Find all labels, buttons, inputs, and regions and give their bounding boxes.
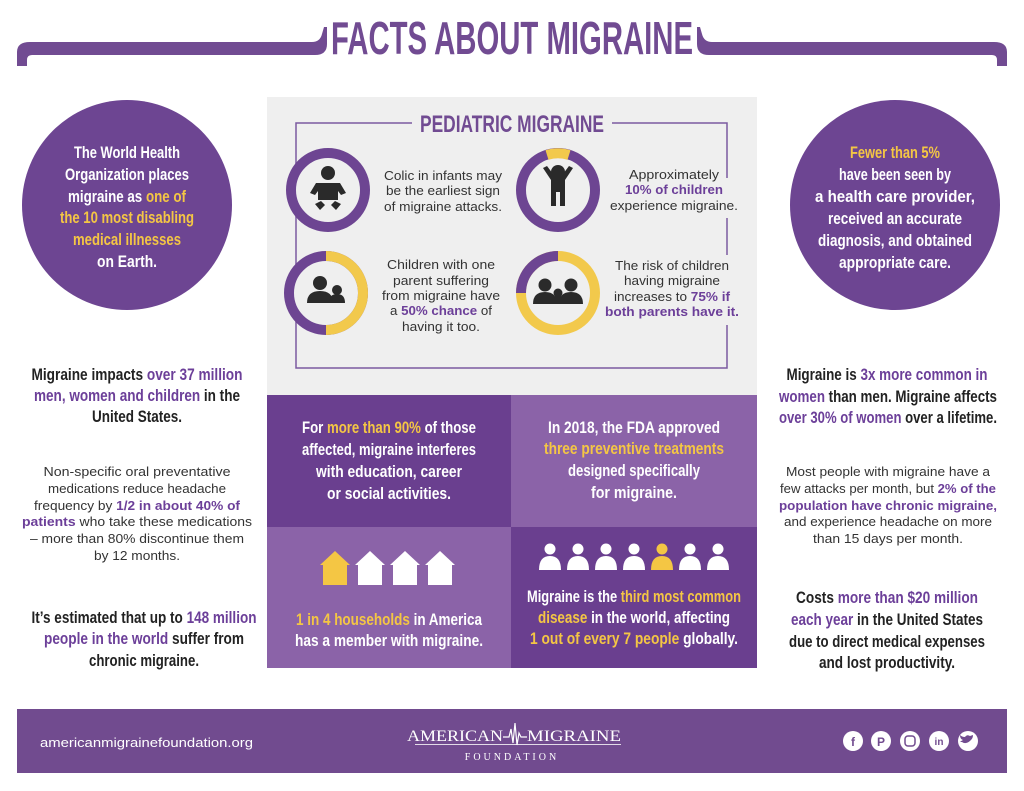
right circle: have been seen by bbox=[839, 165, 951, 184]
left circle: migraine as one of bbox=[68, 187, 186, 206]
right text: chronic migraine: Most people with migraine have a bbox=[786, 465, 990, 479]
box: third most common disease: Migraine is the third most common bbox=[527, 587, 741, 606]
left stat: 37 million: men, women and children in the bbox=[34, 386, 240, 405]
social icons: in bbox=[935, 737, 943, 748]
text: 50% chance bbox=[382, 258, 500, 334]
logo: MIGRAINE bbox=[527, 728, 621, 745]
text: 75% both parents: having migraine bbox=[624, 274, 720, 288]
box: 90% interferes: affected, migraine interferes bbox=[302, 440, 476, 459]
right circle: a health care provider, bbox=[815, 187, 975, 206]
left circle: medical illnesses bbox=[73, 230, 181, 249]
footer bbox=[17, 709, 1007, 773]
text: colic: of migraine attacks. bbox=[384, 200, 502, 214]
text: 75% both parents: The risk of children bbox=[615, 259, 729, 273]
ring: infant bbox=[291, 153, 365, 227]
icon: houses bbox=[320, 551, 455, 585]
text: 10% of children: Approximately bbox=[629, 168, 720, 182]
right circle: diagnosis, and obtained bbox=[818, 231, 972, 250]
left text: preventative medications: by 12 months. bbox=[94, 549, 180, 563]
right stat: costs: Costs more than $20 million bbox=[796, 588, 978, 607]
right circle bbox=[790, 100, 1000, 310]
text: 10% of children: experience migraine. bbox=[610, 199, 738, 213]
box: third most common disease: 1 out of every 7 people globally. bbox=[530, 629, 738, 648]
text: colic: Colic in infants may bbox=[384, 169, 503, 183]
right circle: Fewer than 5% bbox=[850, 143, 940, 162]
left text: preventative medications: – more than 80% discontinue them bbox=[30, 532, 244, 546]
text: 50% chance: Children with one bbox=[387, 258, 495, 272]
right text: chronic migraine: few attacks per month, but 2% of the bbox=[780, 482, 996, 496]
footer url: americanmigrainefoundation.org bbox=[40, 735, 253, 750]
text: 50% chance: from migraine have bbox=[382, 289, 500, 303]
right circle: received an accurate bbox=[828, 209, 962, 228]
left stat: 37 million: Migraine impacts over 37 million bbox=[32, 365, 242, 384]
box: 90% interferes: with education, career bbox=[315, 462, 462, 481]
logo: AMERICAN bbox=[407, 728, 503, 745]
text: 75% both parents: increases to 75% if bbox=[614, 290, 731, 304]
icon: seven people bbox=[539, 544, 729, 570]
left stat: 37 million: United States. bbox=[92, 407, 182, 426]
box: households: has a member with migraine. bbox=[295, 631, 483, 650]
social icons: f bbox=[851, 735, 856, 749]
left text: preventative medications: Non-specific oral preventative bbox=[44, 465, 231, 479]
left text: preventative medications: patients who take these medications bbox=[22, 515, 252, 529]
social icons bbox=[843, 731, 978, 751]
logo: FOUNDATION bbox=[465, 752, 559, 763]
text: 50% chance: a 50% chance of bbox=[390, 304, 493, 318]
text: 10% of children: 10% of children bbox=[625, 183, 723, 197]
box: 90% interferes bbox=[267, 395, 511, 527]
box: third most common disease: disease in the world, affecting bbox=[538, 608, 730, 627]
right text: chronic migraine: and experience headache on more bbox=[784, 515, 992, 529]
box: households bbox=[267, 527, 511, 668]
box: FDA approved bbox=[511, 395, 757, 527]
right stat: costs bbox=[789, 588, 985, 672]
ring: child 10% bbox=[521, 153, 595, 227]
right text: chronic migraine: than 15 days per month. bbox=[813, 532, 963, 546]
left text: preventative medications: medications reduce headache bbox=[48, 482, 226, 496]
title: FACTS ABOUT MIGRAINE bbox=[331, 12, 693, 64]
left stat: 148 million: people in the world suffer from bbox=[44, 629, 244, 648]
left circle: on Earth. bbox=[97, 252, 157, 271]
ring: one parent 50% bbox=[289, 256, 363, 330]
left circle: Organization places bbox=[65, 165, 189, 184]
right stat: 3x more common in women bbox=[778, 365, 997, 427]
right circle: appropriate care. bbox=[839, 253, 951, 272]
left circle bbox=[22, 100, 232, 310]
right stat: 3x more common in women: Migraine is 3x more common in bbox=[786, 365, 988, 384]
text: 50% chance: parent suffering bbox=[393, 274, 489, 288]
box: FDA approved: In 2018, the FDA approved bbox=[548, 418, 720, 437]
right stat: costs: each year in the United States bbox=[791, 610, 983, 629]
logo bbox=[407, 723, 621, 763]
text: colic: be the earliest sign bbox=[386, 184, 500, 198]
right stat: costs: and lost productivity. bbox=[819, 653, 955, 672]
left text: preventative medications: frequency by 1/2 in about 40% of bbox=[34, 499, 241, 513]
left stat: 148 million: chronic migraine. bbox=[89, 651, 199, 670]
left stat: 148 million bbox=[32, 608, 256, 670]
left circle: the 10 most disabling bbox=[60, 208, 194, 227]
box: 90% interferes: or social activities. bbox=[327, 484, 451, 503]
box: households: 1 in 4 households in America bbox=[296, 610, 482, 629]
title bars bbox=[17, 27, 1007, 66]
right stat: 3x more common in women: over 30% of women over a lifetime. bbox=[779, 408, 997, 427]
left stat: 37 million bbox=[32, 365, 242, 426]
left circle: The World Health bbox=[74, 143, 180, 162]
panel: pediatric migraine bbox=[267, 97, 757, 395]
text: colic bbox=[384, 169, 503, 214]
pediatric heading: PEDIATRIC MIGRAINE bbox=[420, 111, 604, 138]
text: 10% of children bbox=[610, 168, 738, 213]
left stat: 148 million: It’s estimated that up to 148 million bbox=[32, 608, 256, 627]
right text: chronic migraine bbox=[779, 465, 997, 546]
box: FDA approved: three preventive treatments bbox=[544, 439, 724, 458]
box: FDA approved: designed specifically bbox=[568, 461, 700, 480]
left text: preventative medications bbox=[22, 465, 252, 563]
ring: both parents 75% bbox=[521, 256, 595, 330]
text: 50% chance: having it too. bbox=[402, 320, 480, 334]
social icons: P bbox=[877, 735, 885, 749]
box: third most common disease bbox=[511, 527, 757, 668]
right text: chronic migraine: population have chronic migraine, bbox=[779, 499, 997, 513]
box: 90% interferes: For more than 90% of those bbox=[302, 418, 476, 437]
text: 75% both parents: both parents have it. bbox=[605, 305, 739, 319]
text: 75% both parents bbox=[605, 259, 739, 319]
box: FDA approved: for migraine. bbox=[591, 483, 677, 502]
